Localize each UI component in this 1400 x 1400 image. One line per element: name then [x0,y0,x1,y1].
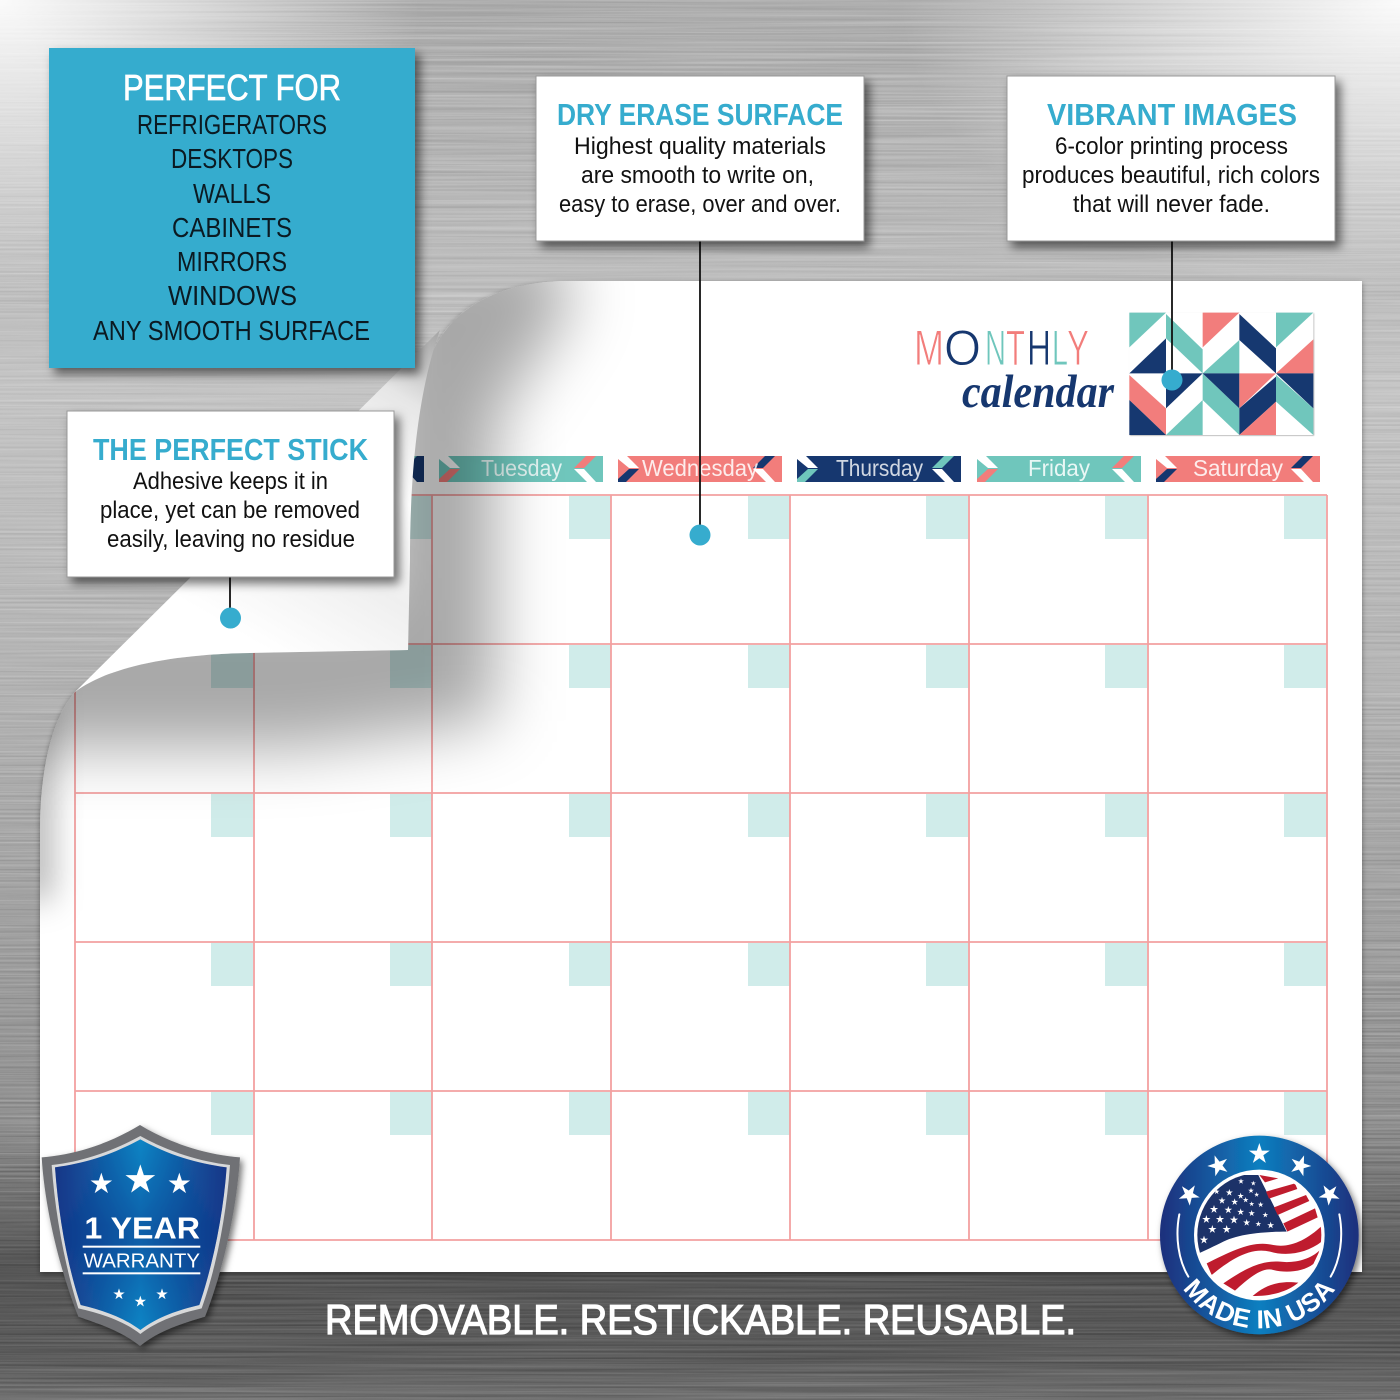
leader line and dot [220,577,241,628]
monthly calendar logo [914,320,1115,418]
flag [1193,1170,1325,1300]
ring arcs [1177,1214,1341,1277]
stick heading: THE PERFECT STICK [93,432,369,467]
ribbon: Tuesday: Tuesday [481,455,562,481]
surface list [93,109,370,346]
logo word: MONTHLY: O [944,320,981,376]
stick body [100,468,360,553]
logo word: MONTHLY: L [1052,320,1068,376]
magnetic calendar sheet [0,240,1362,1272]
vibrant heading: VIBRANT IMAGES [1047,97,1297,132]
logo word: MONTHLY: T [1006,320,1025,376]
vibrant body [1022,133,1320,218]
logo word: MONTHLY: M [914,320,944,376]
top stars [91,1164,190,1193]
panel: perfect for [49,48,415,368]
surface list: CABINETS [172,212,292,243]
dry erase body: are smooth to write on, [581,162,814,189]
callout: dry erase surface [536,76,864,546]
callout: the perfect stick [67,411,394,628]
logo word: calendar: calendar [962,366,1115,418]
ribbon: Monday remnant [260,456,424,482]
stick body: Adhesive keeps it in [133,468,328,495]
ribbon: Saturday: Saturday [1193,455,1283,481]
geometric pattern block [1129,313,1313,435]
leader line and dot [690,241,710,546]
logo word: MONTHLY [914,320,1089,376]
vibrant body: that will never fade. [1073,191,1270,218]
dry erase body [559,133,841,218]
weekday ribbons [260,455,1320,482]
ribbon: Wednesday: Wednesday [642,455,758,481]
ribbon: Saturday [1156,455,1320,482]
surface list: WALLS [193,178,271,209]
logo word: MONTHLY: H [1027,320,1051,376]
leader line and dot [1162,241,1182,390]
logo word: MONTHLY: N [985,320,1006,376]
stick body: place, yet can be removed [100,497,360,524]
curl shadow on sheet [0,240,575,900]
warranty shield badge [42,1125,240,1346]
logo word: MONTHLY: Y [1067,320,1089,376]
dry erase body: easy to erase, over and over. [559,191,841,218]
bottom stars [113,1288,168,1307]
perfect for heading: PERFECT FOR [123,67,341,108]
surface list: DESKTOPS [171,143,293,174]
surface list: WINDOWS [168,280,297,311]
ring stars [1174,1143,1344,1208]
calendar grid [75,495,1327,1240]
surface list: ANY SMOOTH SURFACE [93,315,370,346]
surface list: REFRIGERATORS [137,109,327,140]
ribbon: Thursday: Thursday [836,455,923,481]
ribbon: Friday: Friday [1028,455,1090,481]
sheet body [40,281,1362,1272]
callout: vibrant images [1007,76,1335,390]
WARRANTY text: WARRANTY [84,1250,200,1272]
ribbon: Thursday [797,455,961,482]
vibrant body: 6-color printing process [1055,133,1288,160]
1 YEAR text: 1 YEAR [84,1210,200,1245]
ribbon: Friday [977,455,1141,482]
made in usa badge [1158,1134,1364,1341]
surface list: MIRRORS [177,246,287,277]
tagline: REMOVABLE. RESTICKABLE. REUSABLE. [325,1296,1076,1343]
dry erase heading: DRY ERASE SURFACE [557,97,843,132]
vibrant body: produces beautiful, rich colors [1022,162,1320,189]
stick body: easily, leaving no residue [107,526,355,553]
curled corner flap [75,330,440,692]
MADE IN USA text: MADE IN USA [1184,1278,1336,1328]
dry erase body: Highest quality materials [574,133,826,160]
ribbon: Tuesday [439,455,603,482]
date boxes [211,496,1326,1135]
